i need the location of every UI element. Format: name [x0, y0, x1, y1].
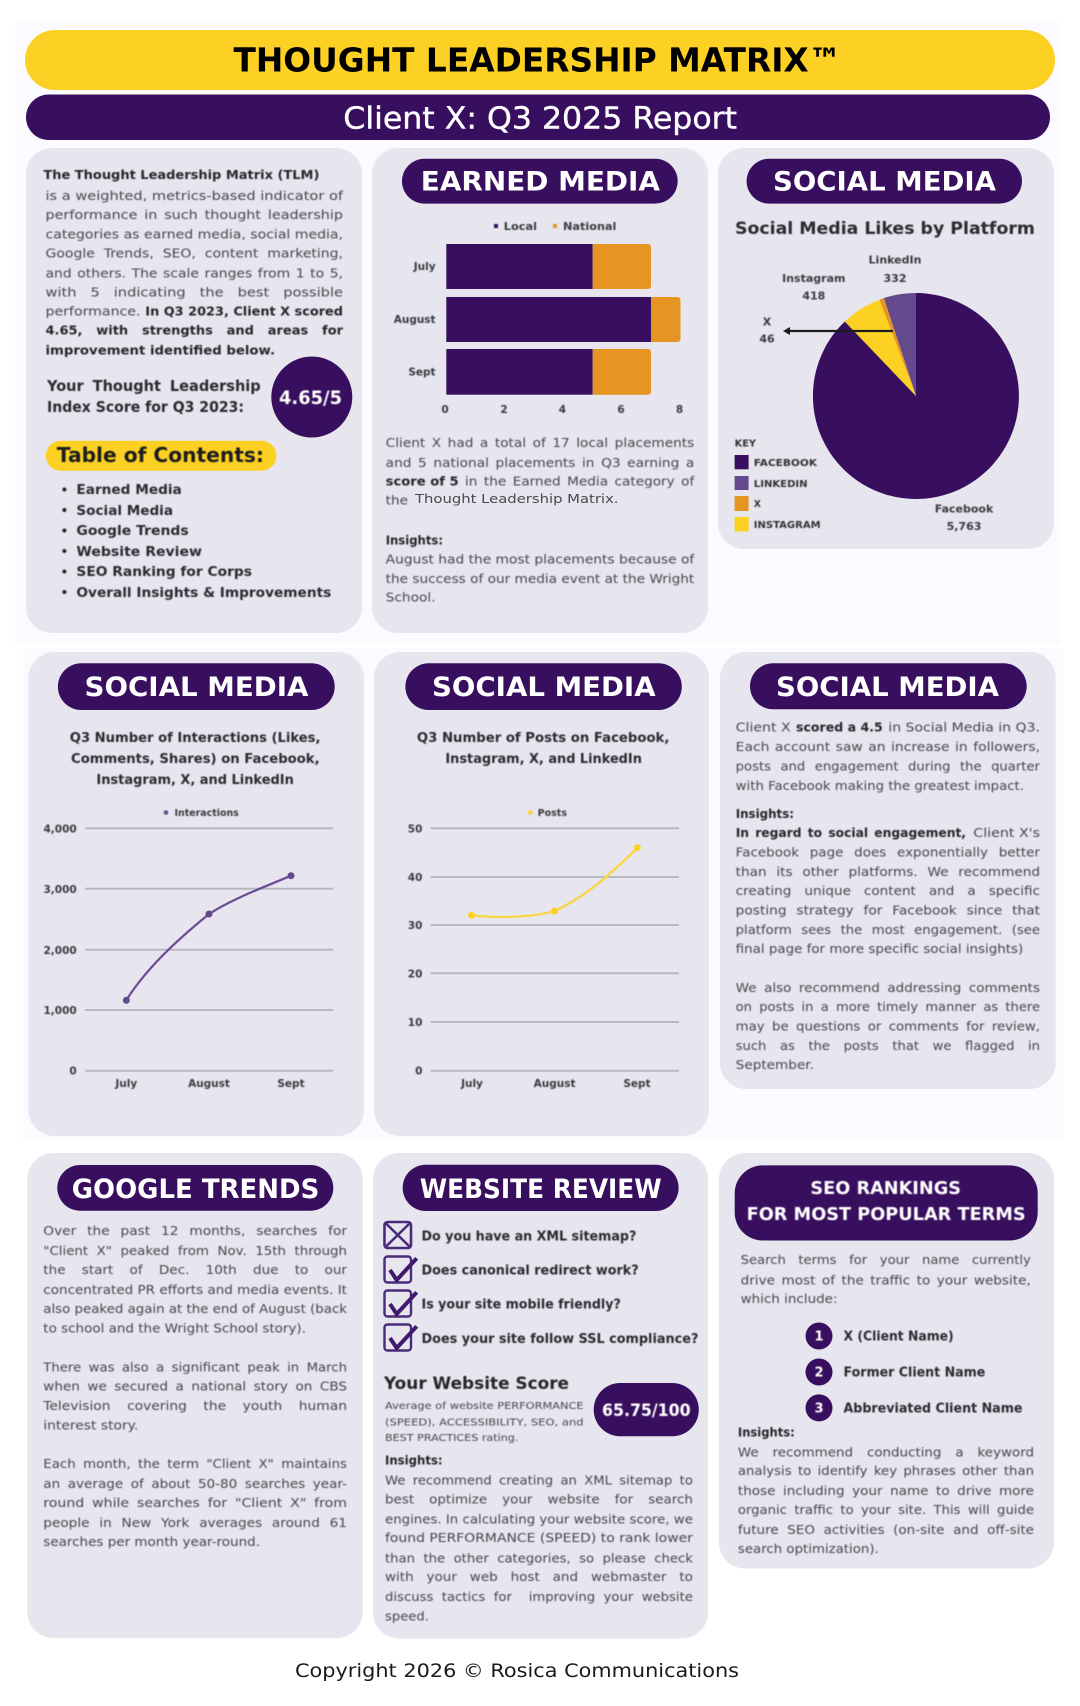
text block: google trends analysis: searches per month year-round.	[43, 1534, 260, 1549]
line chart: posts: July	[460, 1078, 483, 1090]
text block: seo insights: organic traffic to your site. This will guide	[738, 1502, 1034, 1517]
heading: google trends: GOOGLE TRENDS	[72, 1174, 319, 1205]
line chart: posts: August	[534, 1078, 576, 1090]
text block: seo insights	[738, 1424, 1034, 1556]
line chart: interactions: 1,000	[43, 1005, 77, 1017]
score label: Index Score for Q3 2023:	[47, 398, 244, 416]
text block: social insights: Insights:	[736, 806, 794, 821]
text block: google trends analysis: Each month, the term "Client X" maintains	[43, 1456, 347, 1471]
title banner: THOUGHT LEADERSHIP MATRIX™	[234, 40, 842, 79]
text block: earned media insights: School.	[386, 590, 436, 604]
line chart: posts: 50	[408, 823, 422, 835]
line chart: interactions: 3,000	[43, 884, 77, 896]
heading: website review: WEBSITE REVIEW	[420, 1174, 662, 1205]
panel: social media likes	[718, 148, 1054, 549]
heading: social media	[747, 159, 1022, 204]
text block: website insights: engines. In calculating your website score, we	[385, 1512, 693, 1526]
text block: social insights: September.	[736, 1057, 814, 1072]
text block: search terms intro: Search terms for your name currently	[741, 1252, 1031, 1267]
website score text: Average of website PERFORMANCE	[385, 1401, 584, 1412]
text block: google trends analysis: to school and the Wright School story).	[43, 1321, 306, 1336]
text block: social summary: Client X	[736, 720, 791, 734]
checklist questions: Does canonical redirect work?	[422, 1264, 639, 1278]
text block: seo insights: Insights:	[738, 1424, 795, 1439]
panel: social media interactions	[28, 652, 364, 1136]
chart title: Q3 Number of Interactions (Likes,	[70, 731, 320, 746]
stacked bar chart: placements: 4	[559, 404, 566, 416]
chart title: Instagram, X, and LinkedIn	[445, 752, 642, 767]
heading: seo rankings: FOR MOST POPULAR TERMS	[747, 1204, 1026, 1225]
panel: social media insights	[720, 652, 1056, 1089]
chart title: Social Media Likes by Platform	[735, 219, 1035, 239]
heading: social media	[750, 663, 1027, 709]
text block: earned media summary	[386, 435, 695, 508]
chart legend: Interactions	[174, 808, 239, 819]
table of contents list: Overall Insights & Improvements	[76, 586, 332, 601]
line chart: interactions: 0	[69, 1066, 77, 1078]
pie key: KEY	[735, 438, 756, 450]
text block: social insights: Client X's	[973, 825, 1040, 840]
text block: google trends analysis: when we secured a national story on CBS	[43, 1379, 347, 1394]
website score badge	[594, 1383, 699, 1436]
text block: social insights: such as the posts that we flagged in	[736, 1038, 1040, 1053]
chart title	[417, 731, 669, 767]
stacked bar chart: placements: July	[413, 261, 436, 273]
text block: social summary	[736, 720, 1041, 793]
panel: thought leadership intro	[26, 148, 362, 633]
ranked terms list	[806, 1322, 1023, 1421]
pie labels: 332	[884, 272, 906, 285]
checklist questions	[422, 1230, 698, 1347]
text block: social insights: on posts in a more timely manner as there	[736, 999, 1040, 1014]
line chart: posts: 0	[415, 1066, 422, 1078]
pie labels: Instagram	[782, 272, 845, 285]
website score text: (SPEED), ACCESSIBILITY, SEO, and	[385, 1418, 584, 1428]
chart title: Comments, Shares) on Facebook,	[71, 752, 320, 767]
heading: earned media	[402, 159, 678, 204]
ranked terms list: 1	[814, 1330, 824, 1345]
text block: earned media insights: Insights:	[386, 532, 443, 547]
text block: google trends analysis: There was also a significant peak in March	[42, 1359, 347, 1374]
text block: social insights: platform sees the most engagement. (see	[736, 922, 1040, 937]
panel: earned media	[372, 148, 708, 633]
pie key	[735, 438, 821, 532]
pie labels: 46	[759, 332, 775, 346]
text block: social summary: with Facebook making the greatest impact.	[736, 778, 1024, 793]
text block: TLM description: performance.	[46, 304, 140, 318]
ranked terms list: Former Client Name	[844, 1366, 985, 1380]
text block: social insights: creating unique content and a specific	[736, 883, 1040, 898]
text block: social insights: posting strategy for Facebook since that	[736, 902, 1040, 918]
text block: search terms intro: drive most of the traffic to your website,	[741, 1272, 1031, 1287]
table of contents list: Earned Media	[76, 483, 182, 498]
text block: social insights: Facebook page does exponentially better	[736, 844, 1041, 860]
text block: website insights	[385, 1452, 694, 1623]
text block: earned media summary: score of 5	[386, 474, 459, 488]
pie key: INSTAGRAM	[754, 520, 821, 531]
text block: social insights: than its other platforms. We recommend	[736, 864, 1040, 879]
text block: google trends analysis: round while searches for "Client X" from	[43, 1495, 347, 1510]
line chart: posts: Sept	[623, 1078, 651, 1090]
chart legend	[494, 221, 616, 233]
score badge	[271, 356, 352, 438]
stacked bar chart: placements	[394, 221, 683, 416]
line chart: interactions: Sept	[277, 1078, 305, 1090]
website score badge: 65.75/100	[602, 1401, 691, 1421]
heading: earned media: EARNED MEDIA	[421, 167, 661, 198]
panel: website review	[373, 1153, 708, 1638]
heading: social media: SOCIAL MEDIA	[432, 672, 656, 703]
chart legend: Posts	[538, 808, 567, 819]
icon: checked box	[384, 1290, 417, 1316]
checklist questions: Is your site mobile friendly?	[422, 1298, 621, 1312]
website score text: Your Website Score	[383, 1374, 569, 1393]
text block: website insights: best optimize your website for search	[385, 1492, 693, 1506]
text block: social summary: in Social Media in Q3.	[888, 720, 1040, 734]
pie labels: Facebook	[935, 502, 994, 516]
chart legend: Local	[504, 221, 537, 233]
copyright footer: Copyright 2026 © Rosica Communications	[295, 1660, 739, 1682]
stacked bar chart: placements: August	[394, 314, 436, 326]
text block: google trends analysis: people in New York averages around 61	[43, 1515, 347, 1530]
text block: google trends analysis: Television covering the youth human	[42, 1398, 347, 1413]
table of contents list: Google Trends	[76, 524, 189, 539]
text block: earned media summary: Thought Leadership Matrix.	[414, 491, 618, 506]
line chart: interactions: August	[188, 1078, 230, 1090]
ranked terms list: Abbreviated Client Name	[844, 1401, 1023, 1416]
text block: search terms intro	[741, 1252, 1031, 1306]
subtitle banner: Client X: Q3 2025 Report	[343, 102, 737, 136]
website score text: BEST PRACTICES rating.	[385, 1433, 518, 1444]
line chart: interactions: July	[114, 1078, 137, 1090]
score label: Your Thought Leadership	[46, 377, 261, 395]
text block: website insights: speed.	[385, 1608, 429, 1623]
line chart: posts: 30	[408, 920, 422, 932]
text block: google trends analysis: interest story.	[43, 1418, 138, 1433]
text block: google trends analysis: "Client X" peaked from Nov. 15th through	[43, 1243, 347, 1258]
website score text	[383, 1374, 584, 1444]
text block: TLM description: 4.65, with strengths and areas for	[46, 322, 344, 338]
checklist questions: Does your site follow SSL compliance?	[422, 1332, 698, 1347]
checklist	[384, 1222, 698, 1350]
text block: social insights: In regard to social engagement,	[736, 825, 966, 840]
text block: TLM description	[43, 167, 344, 358]
ranked terms list: 3	[814, 1402, 824, 1417]
checklist questions: Do you have an XML sitemap?	[422, 1230, 636, 1244]
score label	[46, 377, 261, 416]
table of contents list: SEO Ranking for Corps	[76, 565, 252, 580]
icon: crossed box	[384, 1222, 411, 1248]
table of contents list	[62, 483, 332, 601]
stacked bar chart: placements: 6	[617, 404, 625, 416]
text block: google trends analysis: the start of Dec. 10th due to our	[43, 1262, 348, 1277]
text block: website insights: found PERFORMANCE (SPEED) to rank lower	[385, 1530, 694, 1545]
text block: seo insights: search optimization).	[738, 1541, 879, 1556]
panel: google trends	[27, 1153, 363, 1638]
text block: website insights: We recommend creating an XML sitemap to	[385, 1473, 693, 1488]
text block: social insights: final page for more specific social insights)	[736, 941, 1023, 956]
text block: earned media summary: Client X had a total of 17 local placements	[386, 435, 694, 450]
pie key: FACEBOOK	[754, 458, 818, 469]
pie labels: 418	[802, 290, 825, 302]
subtitle banner	[26, 94, 1050, 140]
text block: social summary: Each account saw an increase in followers,	[736, 739, 1040, 754]
icon: checked box	[384, 1256, 417, 1282]
pie labels	[759, 254, 994, 533]
text block: website insights: discuss tactics for improving your website	[385, 1589, 693, 1604]
line chart: posts	[408, 808, 679, 1090]
text block: earned media insights: the success of our media event at the Wright	[386, 571, 694, 586]
pie key: X	[754, 499, 762, 510]
icon: checked box	[384, 1324, 417, 1350]
text block: TLM description: and others. The scale ranges from 1 to 5,	[46, 266, 343, 280]
chart title	[70, 731, 320, 788]
text block: google trends analysis: also peaked again at the end of August (back	[43, 1301, 348, 1316]
text block: earned media summary: in the Earned Media category of	[465, 474, 695, 488]
text block: TLM description: improvement identified below.	[46, 342, 275, 358]
text block: website insights: with your web host and webmaster to	[385, 1569, 693, 1584]
text block: TLM description: In Q3 2023, Client X scored	[145, 304, 343, 318]
table of contents heading: Table of Contents:	[57, 443, 264, 467]
heading: social media	[58, 663, 335, 710]
heading: seo rankings	[735, 1165, 1038, 1240]
text block: seo insights: future SEO activities (on-site and off-site	[738, 1522, 1034, 1537]
pie key: LINKEDIN	[754, 479, 808, 490]
text block: google trends analysis: concentrated PR efforts and media events. It	[43, 1282, 347, 1297]
heading: social media: SOCIAL MEDIA	[776, 672, 1000, 703]
chart title: Q3 Number of Posts on Facebook,	[417, 731, 669, 746]
stacked bar chart: placements: 0	[441, 404, 449, 416]
title banner	[25, 30, 1055, 90]
line chart: posts: 40	[408, 872, 422, 884]
text block: TLM description: performance in such thought leadership	[46, 207, 343, 222]
heading: social media: SOCIAL MEDIA	[773, 167, 997, 198]
ranked terms list: X (Client Name)	[844, 1330, 954, 1344]
chart legend: National	[563, 221, 616, 233]
text block: google trends analysis	[42, 1223, 348, 1549]
line chart: interactions	[43, 808, 333, 1090]
heading: social media: SOCIAL MEDIA	[84, 672, 309, 703]
text block: social insights	[736, 806, 1041, 1072]
text block: TLM description: with 5 indicating the best possible	[46, 284, 343, 300]
panel: social media posts	[374, 652, 709, 1136]
heading: seo rankings: SEO RANKINGS	[810, 1178, 961, 1199]
heading: website review	[403, 1165, 679, 1211]
text block: earned media insights: August had the most placements because of	[386, 552, 695, 566]
panel: seo rankings	[719, 1153, 1054, 1568]
stacked bar chart: placements: Sept	[408, 366, 436, 378]
text block: earned media summary: the	[386, 492, 408, 508]
score badge: 4.65/5	[279, 387, 342, 409]
table of contents list: Social Media	[76, 504, 173, 519]
text block: social summary: scored a 4.5	[796, 720, 883, 734]
pie labels: 5,763	[947, 520, 981, 533]
ranked terms list: 2	[814, 1366, 824, 1381]
text block: TLM description: Google Trends, SEO, content marketing,	[46, 246, 343, 260]
line chart: interactions: 2,000	[43, 945, 77, 957]
text block: seo insights: those including your name to drive more	[738, 1483, 1034, 1498]
text block: social summary: posts and engagement during the quarter	[736, 758, 1041, 774]
table of contents list: Website Review	[76, 545, 202, 560]
text block: earned media insights	[386, 532, 695, 604]
text block: google trends analysis: an average of about 50-80 searches year-	[43, 1476, 347, 1491]
text block: google trends analysis: Over the past 12 months, searches for	[43, 1223, 348, 1238]
text block: social insights: We also recommend addressing comments	[736, 980, 1040, 995]
text block: seo insights: We recommend conducting a keyword	[738, 1444, 1034, 1459]
text block: website insights: than the other categories, so please check	[385, 1550, 694, 1565]
text block: earned media summary: and 5 national placements in Q3 earning a	[386, 455, 694, 470]
stacked bar chart: placements: 2	[500, 404, 508, 416]
pie labels: LinkedIn	[869, 254, 921, 266]
heading: google trends	[57, 1165, 333, 1211]
line chart: posts: 10	[408, 1017, 422, 1029]
line chart: interactions: 4,000	[43, 823, 77, 835]
text block: social insights: may be questions or comments for review,	[736, 1018, 1040, 1034]
heading: social media	[405, 663, 682, 710]
text block: seo insights: analysis to identify key phrases other than	[738, 1463, 1034, 1478]
arrow: X callout	[783, 327, 893, 335]
pie labels: X	[763, 316, 772, 328]
chart title: Instagram, X, and LinkedIn	[96, 773, 294, 788]
text block: TLM description: is a weighted, metrics-based indicator of	[46, 188, 344, 203]
pie chart: likes by platform	[813, 293, 1019, 499]
text block: TLM description: The Thought Leadership Matrix (TLM)	[43, 167, 319, 182]
text block: TLM description: categories as earned media, social media,	[46, 226, 343, 242]
line chart: posts: 20	[408, 968, 422, 980]
text block: search terms intro: which include:	[741, 1291, 838, 1306]
text block: website insights: Insights:	[385, 1452, 443, 1468]
stacked bar chart: placements: 8	[676, 404, 683, 416]
